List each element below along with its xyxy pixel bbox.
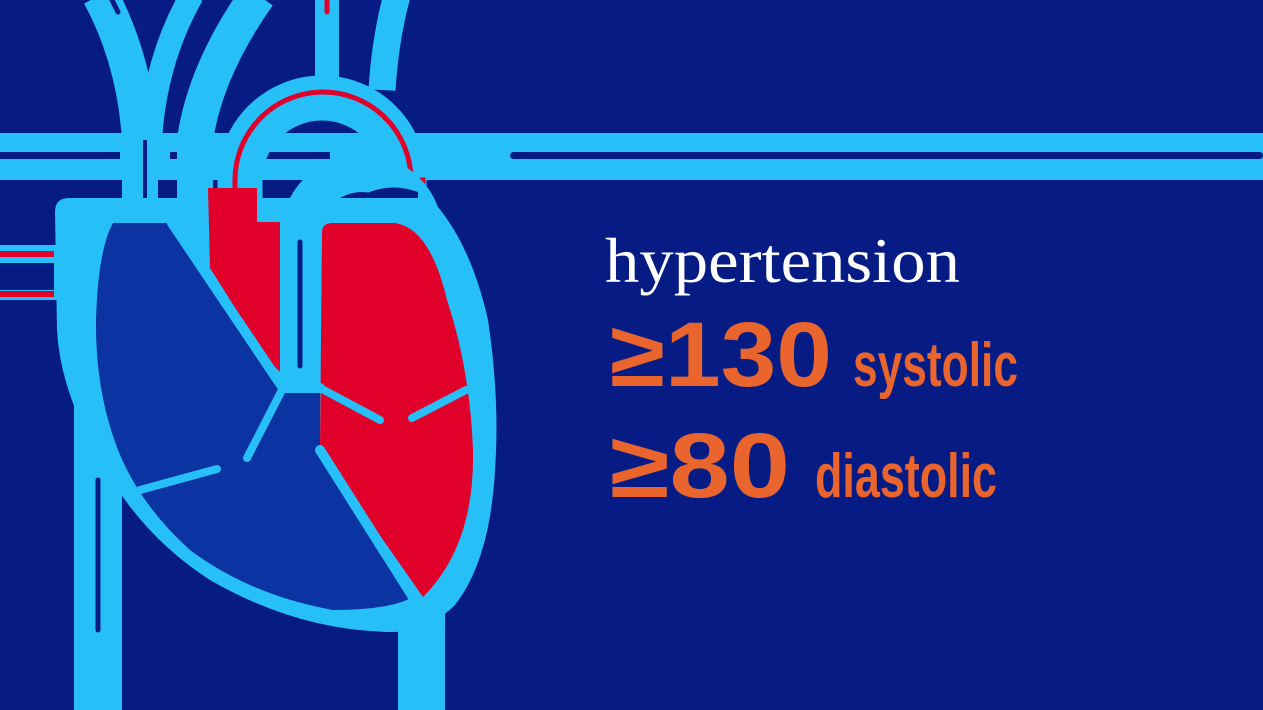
diastolic value: ≥80 (610, 415, 790, 517)
left small vessels (0, 245, 62, 300)
systolic value: ≥130 (610, 304, 832, 406)
heart body (55, 198, 496, 632)
lower vessels (74, 400, 445, 710)
vessel: left Y vena cava (100, 0, 258, 205)
aortic arch (235, 92, 423, 215)
chamber: red atrium (208, 188, 280, 372)
diastolic value (610, 415, 997, 517)
horizontal vessel band (0, 133, 1263, 180)
septum lines (140, 223, 466, 597)
chamber: blue ventricle (96, 223, 413, 610)
vessel: top vessels (327, 0, 397, 90)
heading: hypertension: hypertension (605, 225, 960, 296)
systolic value: systolic (853, 331, 1018, 400)
diastolic value: diastolic (815, 442, 997, 511)
pulmonary arc (300, 173, 424, 390)
chamber: red ventricle (320, 223, 473, 597)
systolic value (610, 304, 1018, 406)
